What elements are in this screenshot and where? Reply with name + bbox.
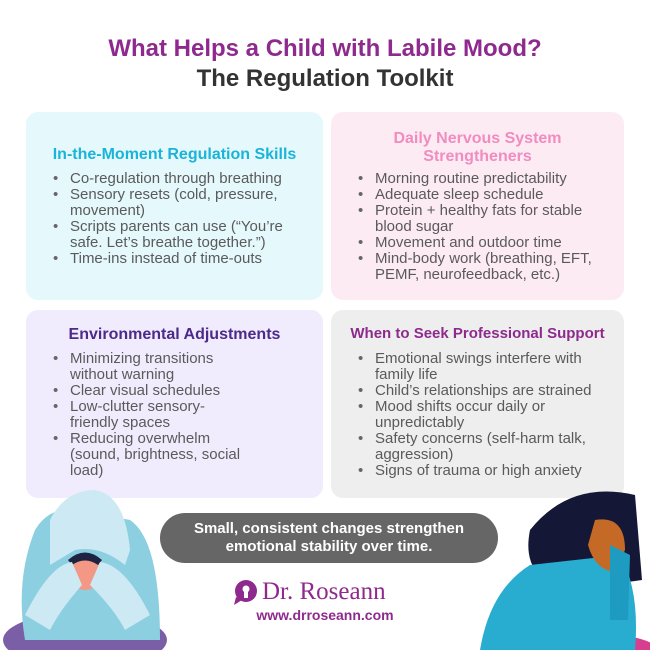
heading: daily: Strengtheners — [423, 148, 532, 165]
heading: in-the-moment: In-the-Moment Regulation Skills — [53, 146, 296, 163]
callout banner: Small, consistent changes strengthen — [194, 520, 464, 537]
heading: daily — [393, 130, 562, 165]
list: in-the-moment: Scripts parents can use (“You’re — [70, 218, 283, 235]
list: professional: Mood shifts occur daily or — [375, 398, 545, 415]
list: daily: Morning routine predictability — [375, 170, 567, 187]
panel: environmental — [26, 310, 323, 498]
icon: logo keyhole — [234, 580, 257, 605]
title: The Regulation Toolkit — [197, 65, 453, 92]
list: environmental: Low-clutter sensory- — [70, 398, 205, 415]
list: daily: Adequate sleep schedule — [375, 186, 543, 203]
list: daily: Protein + healthy fats for stable — [375, 202, 582, 219]
list: in-the-moment: movement) — [70, 202, 145, 219]
list: environmental: Minimizing transitions — [70, 350, 213, 367]
list: environmental — [54, 350, 240, 479]
list: professional — [358, 350, 592, 479]
list: professional: aggression) — [375, 446, 453, 463]
list: professional: Safety concerns (self-harm talk, — [375, 430, 586, 447]
list: in-the-moment: safe. Let’s breathe together.”) — [70, 234, 266, 251]
list: daily: PEMF, neurofeedback, etc.) — [375, 266, 560, 283]
list: daily: Mind-body work (breathing, EFT, — [375, 250, 592, 267]
website url: www.drroseann.com — [256, 607, 394, 623]
list: environmental: Clear visual schedules — [70, 382, 220, 399]
list: daily: blood sugar — [375, 218, 453, 235]
list: in-the-moment: Sensory resets (cold, pressure, — [70, 186, 278, 203]
list: environmental: friendly spaces — [70, 414, 170, 431]
list: in-the-moment — [54, 170, 283, 267]
list: professional: unpredictably — [375, 414, 464, 431]
panel: daily strengtheners — [331, 112, 624, 300]
heading: daily: Daily Nervous System — [393, 130, 562, 147]
list: environmental: load) — [70, 462, 103, 479]
logo: Dr. Roseann — [262, 578, 386, 605]
list: environmental: Reducing overwhelm — [70, 430, 210, 447]
illustration: woman holding head — [480, 492, 650, 650]
heading: environmental: Environmental Adjustments — [69, 326, 280, 343]
illustration: hooded child — [3, 490, 167, 650]
list: professional: family life — [375, 366, 438, 383]
list: professional: Emotional swings interfere with — [375, 350, 582, 367]
panel: professional support — [331, 310, 624, 498]
list: professional: Signs of trauma or high anxiety — [375, 462, 582, 479]
list: in-the-moment: Time-ins instead of time-outs — [70, 250, 262, 267]
callout banner: emotional stability over time. — [226, 538, 432, 555]
list: daily — [358, 170, 592, 283]
list: professional: Child’s relationships are strained — [375, 382, 592, 399]
list: in-the-moment: Co-regulation through breathing — [70, 170, 282, 187]
title — [108, 35, 542, 92]
heading: professional: When to Seek Professional Support — [350, 325, 605, 342]
list: environmental: (sound, brightness, social — [70, 446, 240, 463]
list: environmental: without warning — [70, 366, 174, 383]
callout banner — [160, 513, 498, 563]
list: daily: Movement and outdoor time — [375, 234, 562, 251]
title: What Helps a Child with Labile Mood? — [108, 35, 542, 62]
panel: in-the-moment — [26, 112, 323, 300]
